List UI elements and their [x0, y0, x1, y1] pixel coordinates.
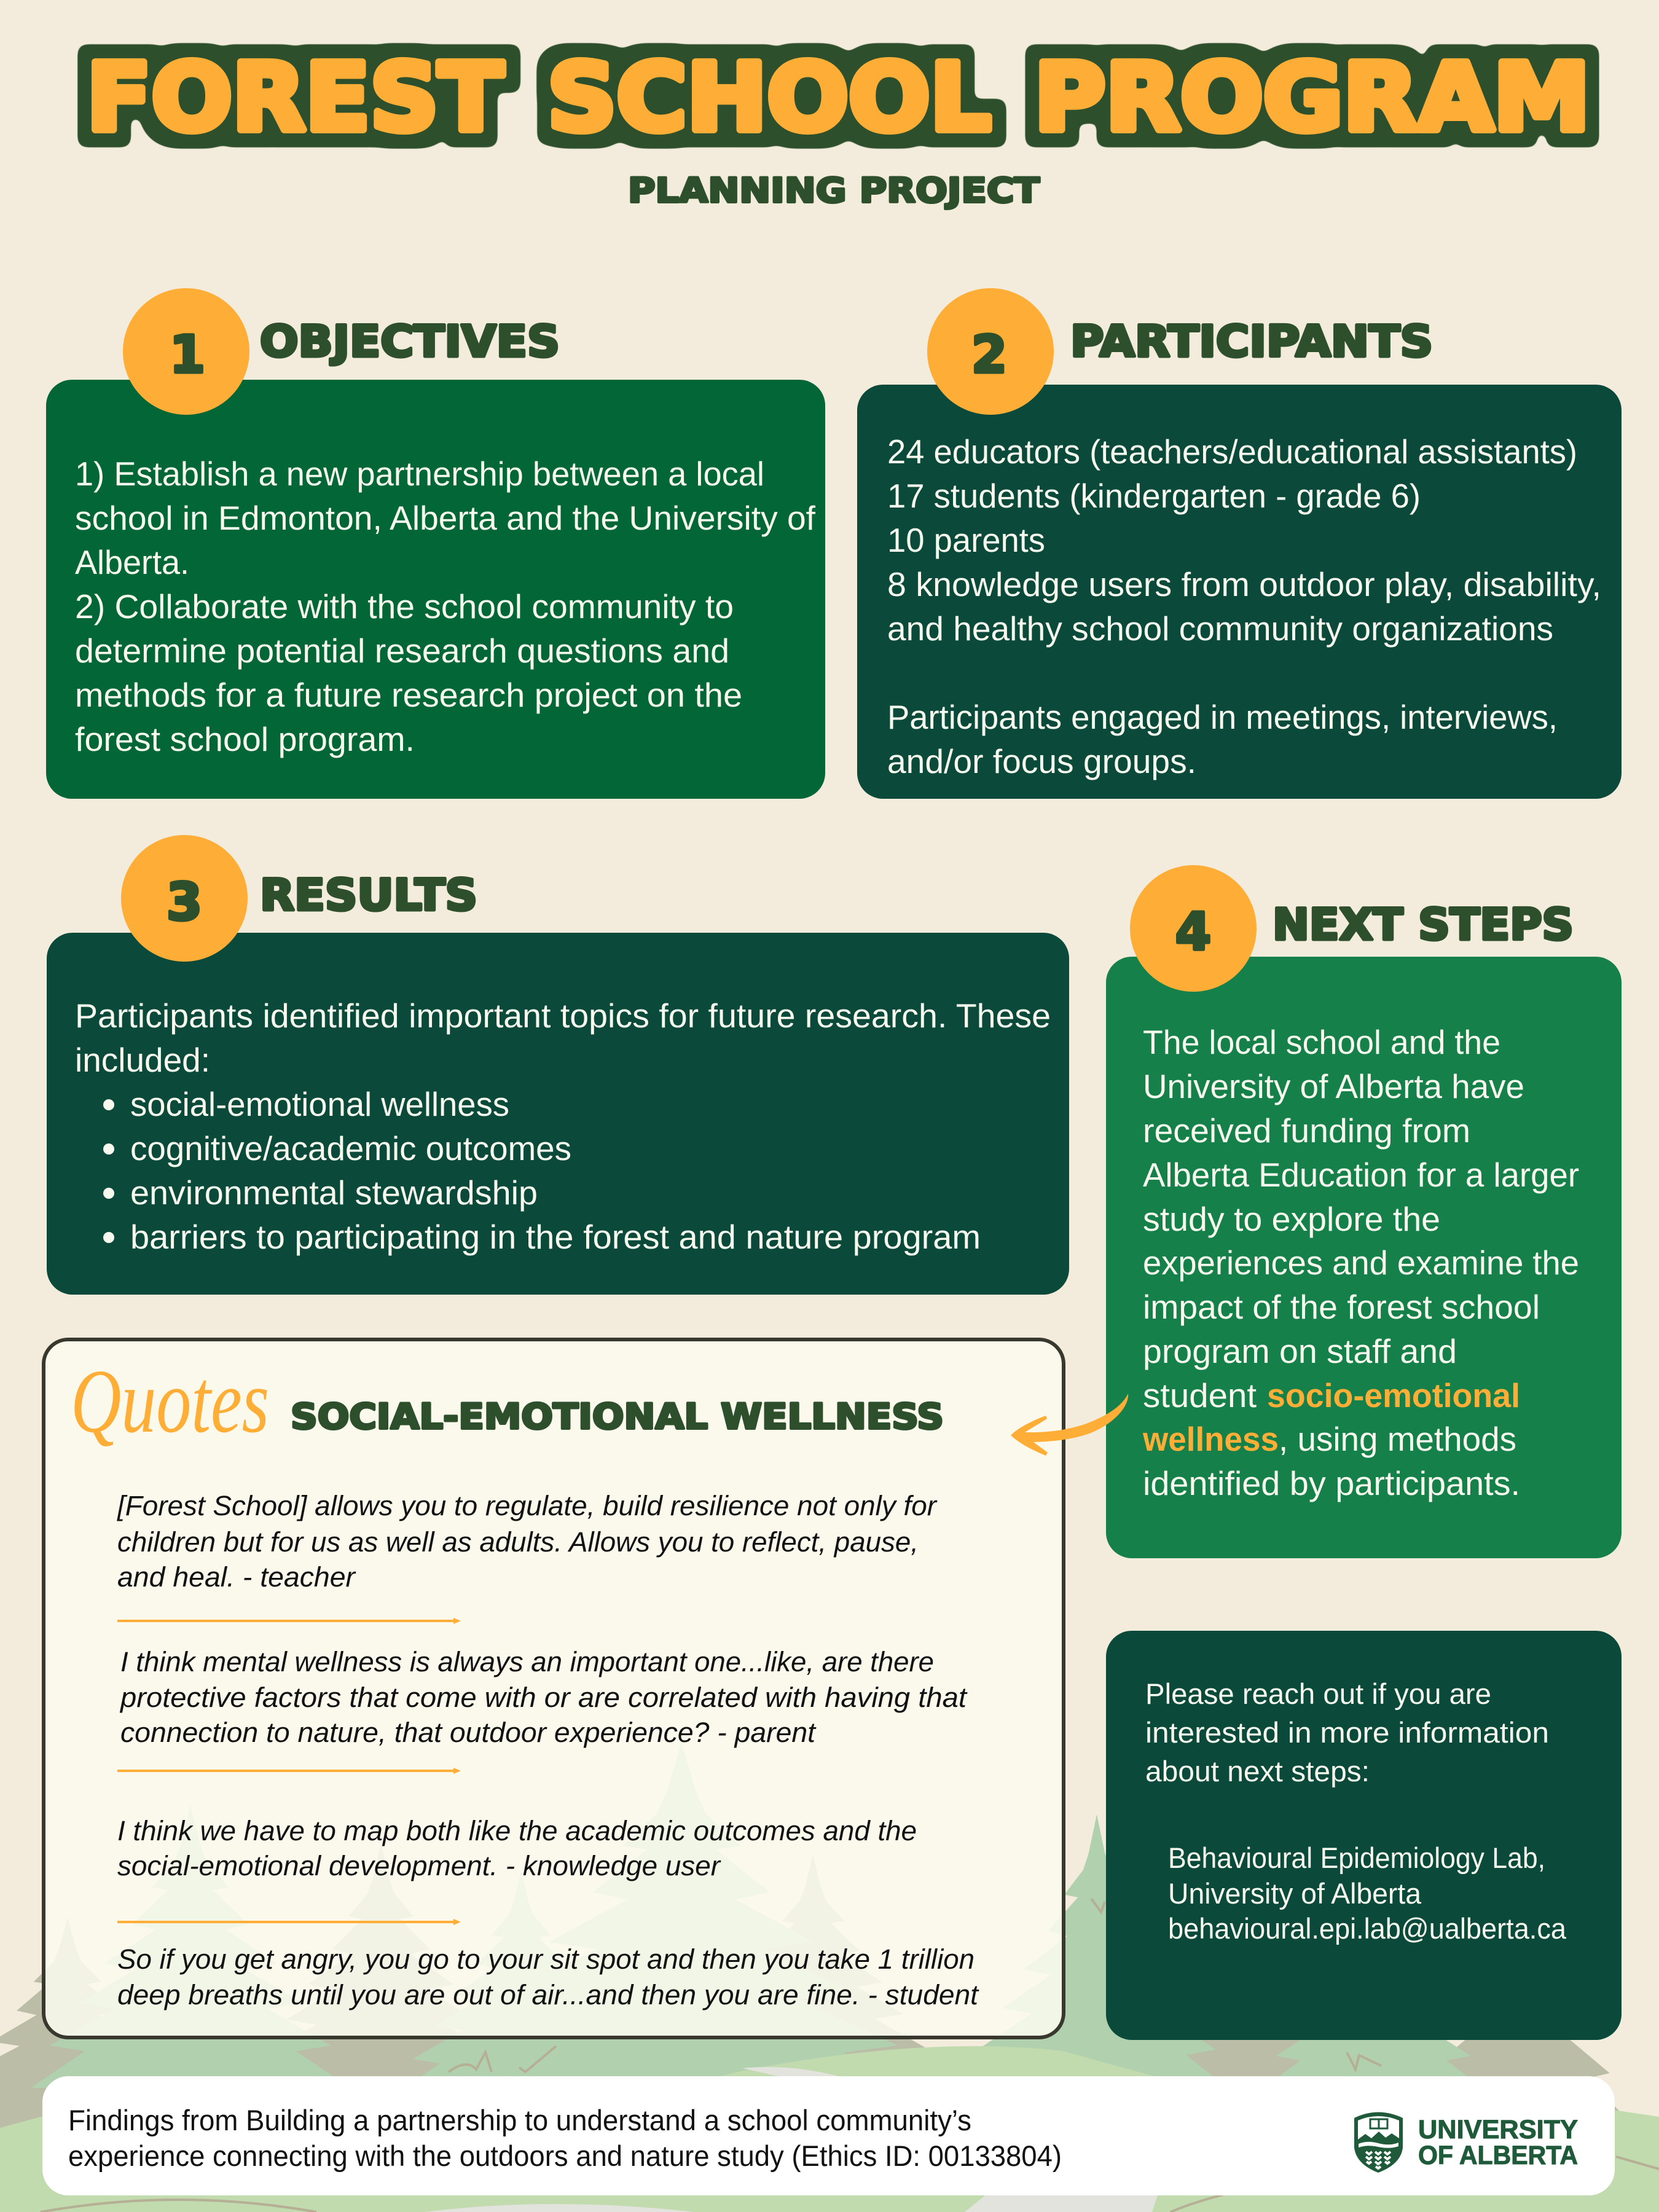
- quotes script label: Quotes: [71, 1351, 269, 1452]
- panel: quotes: [44, 1339, 1064, 2037]
- next steps text: socio-emotional: [1267, 1376, 1520, 1414]
- participants number badge: 2: [971, 324, 1007, 385]
- title: [87, 44, 1590, 152]
- contact details text: University of Alberta: [1168, 1877, 1422, 1910]
- objectives text: school in Edmonton, Alberta and the University of: [75, 499, 816, 537]
- footer citation text: experience connecting with the outdoors and nature study (Ethics ID: 00133804): [68, 2139, 1062, 2172]
- next steps text: [1142, 1023, 1579, 1502]
- objectives number badge: [123, 288, 249, 415]
- results number badge: [121, 835, 248, 962]
- results text: environmental stewardship: [130, 1174, 538, 1212]
- title: PROGRAM: [1034, 44, 1590, 152]
- participants text: 24 educators (teachers/educational assistants): [887, 433, 1577, 471]
- next steps text: The local school and the: [1143, 1023, 1500, 1061]
- next steps text: program on staff and: [1143, 1332, 1457, 1370]
- results text: [75, 997, 1051, 1256]
- results text: barriers to participating in the forest and nature program: [130, 1218, 981, 1256]
- results heading: RESULTS: [260, 870, 477, 920]
- objectives text: 1) Establish a new partnership between a local: [75, 455, 764, 493]
- contact details text: behavioural.epi.lab@ualberta.ca: [1168, 1912, 1567, 1945]
- title: SCHOOL: [547, 44, 991, 152]
- panel: next steps: [1106, 865, 1622, 1558]
- next steps text: , using methods: [1279, 1420, 1516, 1458]
- contact details text: Behavioural Epidemiology Lab,: [1168, 1841, 1545, 1874]
- objectives heading: OBJECTIVES: [260, 316, 560, 367]
- footer citation text: [68, 2104, 1062, 2172]
- next steps text: University of Alberta have: [1143, 1067, 1524, 1105]
- results text: social-emotional wellness: [130, 1085, 509, 1123]
- objectives text: 2) Collaborate with the school community to: [75, 587, 734, 626]
- participants text: and/or focus groups.: [887, 742, 1196, 780]
- quote: teacher: children but for us as well as adults. Allows you to reflect, pause,: [117, 1526, 919, 1558]
- objectives text: [75, 455, 816, 758]
- University of Alberta wordmark: [1418, 2115, 1578, 2170]
- quote: knowledge user: I think we have to map both like the academic outcomes and the: [117, 1815, 917, 1846]
- University of Alberta wordmark: UNIVERSITY: [1418, 2115, 1578, 2144]
- quote: knowledge user: [117, 1815, 917, 1881]
- participants text: 10 parents: [887, 521, 1045, 559]
- participants text: and healthy school community organizations: [887, 610, 1553, 648]
- contact invitation text: about next steps:: [1145, 1755, 1370, 1787]
- next steps number badge: 4: [1175, 901, 1211, 962]
- footer citation text: Findings from Building a partnership to understand a school community’s: [68, 2104, 971, 2136]
- results text: included:: [75, 1041, 210, 1079]
- objectives text: Alberta.: [75, 543, 189, 581]
- contact invitation text: Please reach out if you are: [1145, 1677, 1491, 1710]
- contact details text: [1168, 1841, 1567, 1945]
- next steps text: Alberta Education for a larger: [1143, 1156, 1579, 1194]
- next steps text: student: [1143, 1376, 1257, 1414]
- subtitle: PLANNING PROJECT: [628, 171, 1040, 210]
- objectives number badge: 1: [170, 324, 205, 385]
- quote: student: deep breaths until you are out of air...and then you are fine. - student: [117, 1979, 980, 2010]
- quote: teacher: [117, 1490, 938, 1593]
- next steps text: study to explore the: [1143, 1200, 1440, 1238]
- next steps text: identified by participants.: [1143, 1464, 1520, 1502]
- next steps number badge: [1130, 865, 1257, 992]
- participants heading: PARTICIPANTS: [1070, 316, 1433, 367]
- contact invitation text: [1145, 1677, 1549, 1787]
- quote: student: So if you get angry, you go to your sit spot and then you take 1 trillion: [117, 1943, 975, 1975]
- participants text: 8 knowledge users from outdoor play, disability,: [887, 565, 1601, 603]
- University of Alberta wordmark: OF ALBERTA: [1418, 2141, 1578, 2170]
- objectives text: methods for a future research project on the: [75, 676, 742, 714]
- objectives text: determine potential research questions and: [75, 632, 729, 670]
- participants text: 17 students (kindergarten - grade 6): [887, 477, 1421, 515]
- panel: contact: [1106, 1631, 1622, 2040]
- results text: Participants identified important topics for future research. These: [75, 997, 1051, 1035]
- footer panel: [42, 2076, 1615, 2195]
- quote: parent: protective factors that come with or are correlated with having that: [119, 1682, 968, 1713]
- quote: parent: connection to nature, that outdoor experience? - parent: [120, 1717, 817, 1748]
- next steps text: wellness: [1142, 1420, 1279, 1458]
- panel: results: [47, 835, 1069, 1295]
- panel: objectives: [46, 288, 825, 799]
- arrow: next steps to quotes: [1011, 1394, 1128, 1456]
- quote: student: [117, 1943, 980, 2010]
- quote: parent: I think mental wellness is always an important one...like, are there: [120, 1646, 934, 1677]
- participants text: [887, 433, 1601, 780]
- participants number badge: [927, 288, 1054, 415]
- objectives text: forest school program.: [75, 720, 415, 758]
- panel: participants: [857, 288, 1622, 799]
- next steps heading: NEXT STEPS: [1273, 900, 1574, 950]
- background: forest landscape: [0, 1743, 1659, 2212]
- results text: cognitive/academic outcomes: [130, 1129, 571, 1167]
- quote: knowledge user: social-emotional development. - knowledge user: [117, 1850, 721, 1881]
- quote: teacher: [Forest School] allows you to regulate, build resilience not only for: [117, 1490, 938, 1521]
- next steps text: received funding from: [1143, 1112, 1470, 1150]
- icon: University of Alberta shield: [1354, 2112, 1403, 2173]
- participants text: Participants engaged in meetings, interviews,: [887, 698, 1558, 736]
- results number badge: 3: [167, 872, 202, 932]
- title: FOREST: [87, 44, 503, 152]
- next steps text: experiences and examine the: [1143, 1244, 1579, 1282]
- quote: teacher: and heal. - teacher: [117, 1561, 356, 1593]
- quote: parent: [119, 1646, 968, 1748]
- next steps text: impact of the forest school: [1143, 1288, 1540, 1326]
- contact invitation text: interested in more information: [1145, 1716, 1549, 1749]
- quotes heading: SOCIAL-EMOTIONAL WELLNESS: [291, 1397, 944, 1437]
